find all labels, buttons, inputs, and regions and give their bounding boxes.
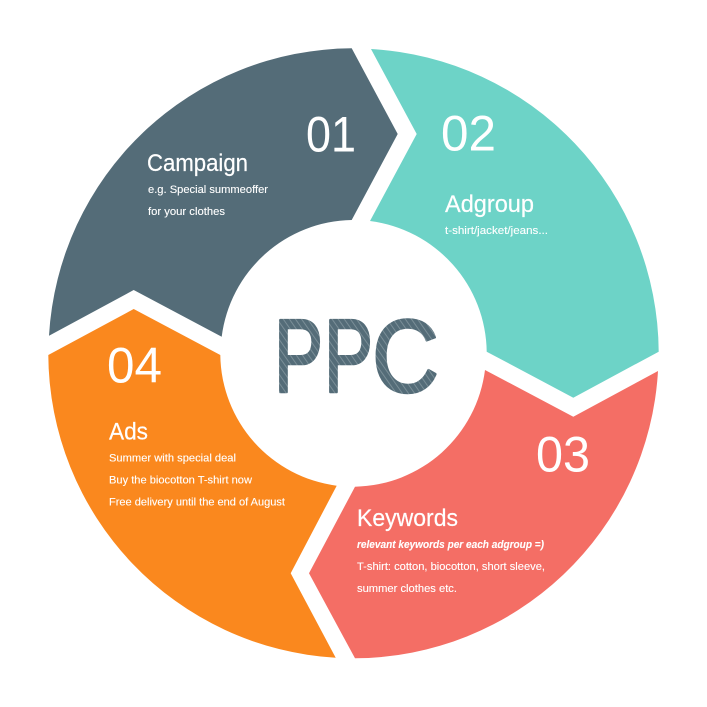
panel: keywords segment <box>309 370 658 658</box>
text block: keywords description: summer clothes etc. <box>357 583 457 595</box>
segment shape: slate arrow <box>49 48 398 337</box>
text block: ads description: Buy the biocotton T-shirt now <box>109 474 252 486</box>
heading: Adgroup: Adgroup <box>445 191 534 218</box>
center title: PPC: P <box>274 299 323 415</box>
segment shape: teal arrow <box>370 49 659 398</box>
text block: ads description <box>109 452 285 508</box>
center title: PPC <box>274 299 439 415</box>
text block: campaign description: e.g. Special summeoffer <box>148 184 268 196</box>
text block: ads description: Free delivery until the end of August <box>109 496 285 508</box>
panel: adgroup segment <box>370 49 659 398</box>
step number 04: 04 <box>107 338 162 394</box>
center title: PPC: P <box>324 299 373 415</box>
segment shape: coral arrow <box>309 370 658 658</box>
text block: keywords description <box>357 539 545 595</box>
panel: ads segment <box>48 309 337 658</box>
heading: Campaign: Campaign <box>147 150 248 177</box>
center title: PPC: C <box>372 299 439 415</box>
text block: ads description: Summer with special deal <box>109 452 236 464</box>
panel: campaign segment <box>49 48 398 337</box>
text block: keywords description: T-shirt: cotton, biocotton, short sleeve, <box>357 561 545 573</box>
segment shape: orange arrow <box>48 309 337 658</box>
text block: campaign description <box>148 184 268 218</box>
text block: campaign description: for your clothes <box>148 206 226 218</box>
step number 01: 01 <box>306 106 356 162</box>
step number 03: 03 <box>536 426 590 482</box>
heading: Ads: Ads <box>109 418 148 446</box>
text block: keywords description: relevant keywords per each adgroup =) <box>357 539 544 551</box>
heading: Keywords: Keywords <box>357 505 458 532</box>
step number 02: 02 <box>441 106 496 162</box>
text block: adgroup description: t-shirt/jacket/jeans... <box>445 225 548 237</box>
